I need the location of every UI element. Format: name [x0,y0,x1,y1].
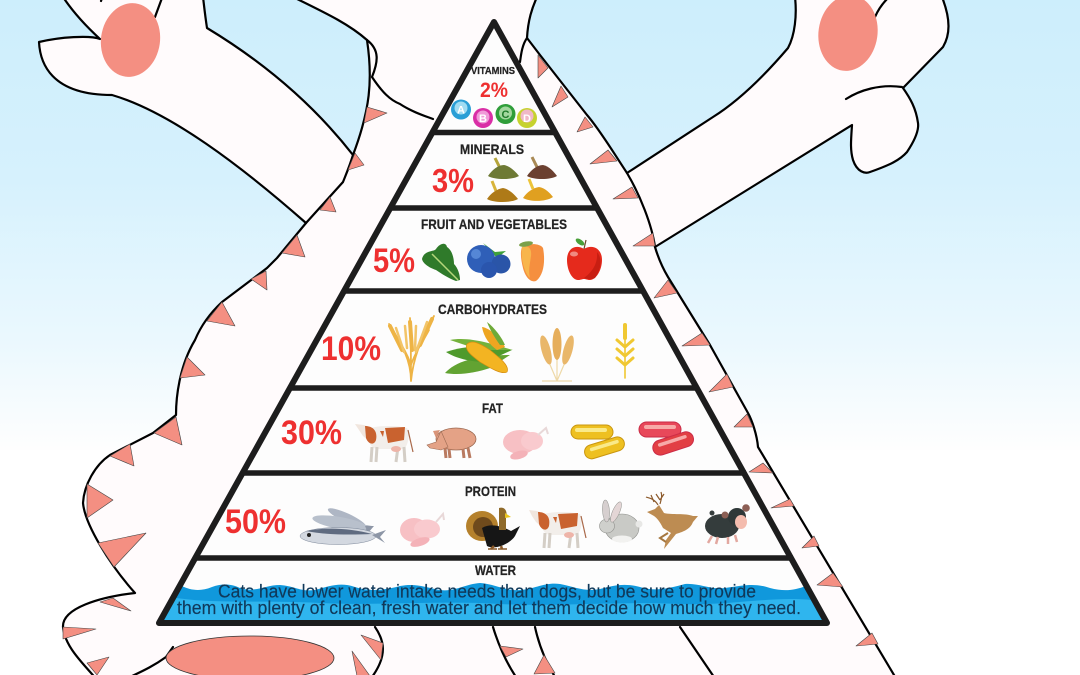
heading: fruit and vegetables: FRUIT AND VEGETABLES [421,216,567,232]
icon: mango [519,240,544,281]
icon: rabbit [600,500,642,542]
background sky [0,0,1080,450]
icon: apple [567,237,602,280]
water band [162,583,824,621]
tier: water [177,562,801,618]
icon: cow [355,424,413,462]
tier: fat [281,400,695,462]
icon: three wheat ears [538,328,576,381]
tier: fruit and vegetables [373,216,602,281]
percent: 2%: 2% [480,79,508,102]
icon: golden wheat [617,325,633,378]
icon: vitamin A: A [457,104,465,116]
percent: 50%: 50% [225,503,286,541]
heading: minerals: MINERALS [460,141,524,157]
icon: vitamin B: B [479,113,487,125]
icon: wheat sheaf [389,316,434,381]
icon: deer [646,492,698,549]
icon: red capsules [639,422,695,457]
icon: corn [445,322,513,374]
illustration: cat paw pads [96,0,883,675]
icon: black sheep [705,504,750,544]
icon: fish [300,505,386,544]
heading: water: WATER [475,562,516,578]
cat inner lines [101,0,902,675]
icon: blueberries [467,243,510,278]
icon: leafy greens [422,244,460,281]
percent: 30%: 30% [281,414,342,452]
tier: carbohydrates [321,301,633,381]
icon: mineral piles [487,157,557,202]
percent: 10%: 10% [321,330,381,368]
icon: yellow capsules [571,425,626,461]
water text line two: them with plenty of clean, fresh water and let them decide how much they need. [177,598,801,618]
percent: 5%: 5% [373,242,415,280]
water text: Cats have lower water intake needs than dogs, but be sure to provide [218,582,756,602]
icon: turkey [466,508,520,549]
pyramid outline and tier dividers [159,22,827,623]
icon: cow [529,510,586,548]
icon: vitamin D: D [523,113,531,125]
pyramid body [159,22,827,623]
tier: vitamins [451,66,537,128]
percent: 3%: 3% [432,162,474,199]
illustration: cat stripes [63,55,878,675]
heading: protein: PROTEIN [465,483,516,499]
icon: pig [427,428,476,458]
icon: vitamin C: C [502,109,510,121]
heading: fat: FAT [482,400,503,416]
heading: vitamins: VITAMINS [471,66,515,77]
icon: raw chicken [503,428,548,461]
tier: protein [225,483,750,549]
heading: carbohydrates: CARBOHYDRATES [438,301,547,317]
tier: minerals [432,141,557,202]
icon: raw chicken [400,514,444,549]
